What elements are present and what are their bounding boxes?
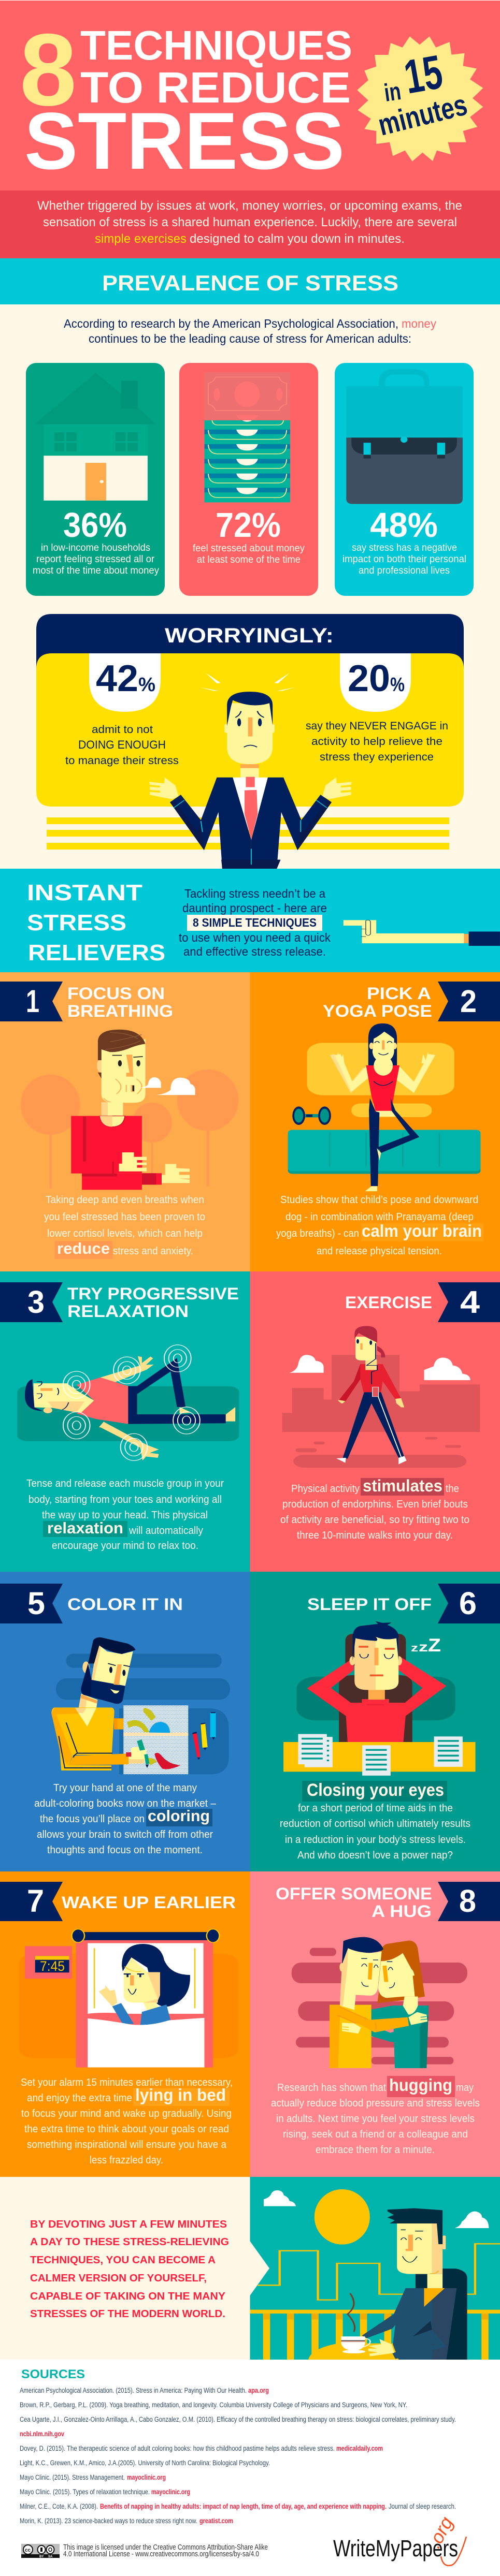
stat tag 20%: % bbox=[390, 674, 405, 696]
text: coloring: Try your hand at one of the many bbox=[53, 1782, 197, 1794]
text: sleep: And who doesn’t love a power nap? bbox=[297, 1849, 453, 1861]
stat tag 42%: % bbox=[138, 674, 155, 696]
stat 36%: 36% bbox=[63, 506, 127, 545]
ribbon number 8: 8 bbox=[459, 1883, 476, 1919]
text: relaxation bbox=[26, 1477, 224, 1552]
panel: technique 7 wake up earlier bbox=[0, 1871, 250, 2177]
intro band: Whether triggered by issues at work, money worries, or upcoming exams, the bbox=[37, 199, 462, 213]
ribbon number 8 bbox=[438, 1882, 500, 1921]
panel: 48 percent card bbox=[335, 363, 474, 596]
logo: WriteMyPapers.org: WriteMyPapers bbox=[333, 2535, 458, 2562]
panel: instant stress relievers bbox=[0, 869, 500, 972]
text: yoga bbox=[276, 1194, 483, 1257]
text: yoga: yoga breaths) - can bbox=[276, 1227, 359, 1239]
sources bbox=[20, 2367, 456, 2525]
panel: 36 percent card bbox=[26, 363, 165, 596]
panel: technique 5 color it in bbox=[0, 1572, 250, 1871]
illustration: man lying on mat bbox=[17, 1345, 239, 1460]
zzZ text: Z bbox=[428, 1635, 441, 1656]
heading: pick a yoga pose: PICK A bbox=[367, 984, 431, 1003]
intro text: daunting prospect - here are bbox=[182, 901, 327, 915]
badge: in 15 minutes: in bbox=[382, 78, 403, 107]
heading: worryingly: WORRYINGLY: bbox=[165, 624, 334, 647]
icon: briefcase bbox=[346, 369, 463, 504]
text 20%: activity to help relieve the bbox=[311, 736, 442, 748]
panel: closing statement: BY DEVOTING JUST A FEW MINUTES bbox=[30, 2219, 227, 2230]
panel: 72 percent card bbox=[179, 363, 318, 596]
text: hug: may bbox=[456, 2082, 474, 2094]
icon: creative commons badge bbox=[21, 2544, 60, 2558]
header panel bbox=[0, 1, 500, 191]
logo: WriteMyPapers.org bbox=[333, 2513, 466, 2566]
ribbon number 6 bbox=[438, 1584, 500, 1623]
panel: closing statement: STRESSES OF THE MODERN WORLD. bbox=[30, 2308, 225, 2320]
text 42% bbox=[65, 724, 179, 767]
ribbon number 3: 3 bbox=[27, 1284, 45, 1320]
heading: try progressive relaxation bbox=[67, 1284, 239, 1321]
stat 72%: 72% bbox=[216, 506, 281, 545]
heading: focus on breathing: FOCUS ON bbox=[67, 984, 165, 1003]
icon: pointing hand bbox=[344, 920, 500, 946]
panel: closing statement bbox=[0, 2177, 269, 2360]
text: coloring: allows your brain to switch off from other bbox=[37, 1828, 213, 1840]
badge: in 15 minutes bbox=[357, 36, 483, 162]
ribbon number 2 bbox=[438, 982, 500, 1021]
illustration: man napping at desk bbox=[283, 1621, 476, 1776]
ribbon number 5 bbox=[0, 1584, 63, 1623]
ribbon number 4: 4 bbox=[460, 1284, 480, 1320]
panel: technique 1 focus on breathing bbox=[0, 972, 250, 1272]
intro band: sensation of stress is a shared human experience. Luckily, there are several bbox=[43, 215, 457, 229]
ribbon number 6: 6 bbox=[459, 1586, 477, 1621]
source list: Benefits of napping in healthy adults: impact of nap length, time of day, age, and experience with napping. bbox=[100, 2502, 387, 2510]
yellow stripes bbox=[47, 817, 449, 850]
ribbon number 3 bbox=[0, 1282, 63, 1322]
ribbon number 7: 7 bbox=[27, 1883, 44, 1919]
source list: ncbi.nlm.nih.gov bbox=[20, 2430, 64, 2438]
title: TO REDUCE: TO REDUCE bbox=[80, 63, 351, 112]
text: coloring: the focus you’ll place on bbox=[40, 1813, 145, 1825]
text: exercise: the bbox=[446, 1483, 459, 1495]
panel: 36 percent card: report feeling stressed all or bbox=[36, 553, 154, 565]
source list: mayoclinic.org bbox=[151, 2488, 190, 2496]
intro band: simple exercises bbox=[95, 232, 187, 246]
heading: offer someone a hug: A HUG bbox=[372, 1902, 432, 1921]
text: breathing: reduce bbox=[57, 1239, 110, 1257]
heading: pick a yoga pose: YOGA POSE bbox=[323, 1002, 432, 1020]
intro text bbox=[179, 887, 331, 958]
text: hug: embrace them for a minute. bbox=[316, 2144, 435, 2156]
text: relaxation: body, starting from your toes and working all bbox=[28, 1494, 222, 1505]
source list: Light, K.C., Grewen, K.M., Amico, J.A.(2005). University of North Carolina: Biological Psychology. bbox=[20, 2459, 270, 2467]
panel: closing statement: TECHNIQUES, YOU CAN BECOME A bbox=[30, 2255, 216, 2266]
prevalence intro text: According to research by the American Psychological Association, bbox=[64, 317, 398, 330]
license text bbox=[63, 2543, 268, 2558]
heading: focus on breathing: BREATHING bbox=[67, 1002, 173, 1020]
heading: prevalence of stress bbox=[0, 258, 500, 304]
source list: Brown, R.P., Gerbarg, P.L. (2009). Yoga breathing, meditation, and longevity. Columbia University College of Physicians and Surgeons, New York, NY. bbox=[20, 2401, 407, 2409]
clock time: 7:45 bbox=[40, 1958, 65, 1974]
text: sleep: Closing your eyes bbox=[307, 1780, 444, 1800]
prevalence intro text: continues to be the leading cause of stress for American adults: bbox=[89, 332, 411, 345]
text: exercise bbox=[280, 1476, 469, 1541]
text: hug: rising, seek out a friend or a colleague and bbox=[283, 2128, 468, 2140]
text 20%: say they NEVER ENGAGE in bbox=[306, 720, 448, 732]
license text: 4.0 International License - www.creativecommons.org/licenses/by-sa/4.0 bbox=[63, 2550, 259, 2558]
illustration: bearded man coloring bbox=[51, 1637, 230, 1774]
text: breathing: stress and anxiety. bbox=[113, 1245, 193, 1257]
text: hug: actually reduce blood pressure and stress levels bbox=[271, 2097, 480, 2109]
heading: instant stress relievers: STRESS bbox=[27, 910, 126, 935]
text: hug: Research has shown that bbox=[277, 2082, 386, 2094]
license text: This image is licensed under the Creative Commons Attribution-Share Alike bbox=[63, 2543, 268, 2552]
text: exercise: stimulates bbox=[363, 1476, 442, 1495]
ribbon number 4 bbox=[438, 1282, 500, 1322]
icon: creative commons badge: SA bbox=[48, 2555, 53, 2558]
text: yoga: calm your brain bbox=[362, 1221, 482, 1240]
text: wake up: and enjoy the extra time bbox=[27, 2092, 132, 2104]
text: relaxation: will automatically bbox=[128, 1525, 204, 1536]
heading: sources: SOURCES bbox=[21, 2367, 85, 2381]
ribbon number 1 bbox=[0, 982, 63, 1021]
text: breathing: Taking deep and even breaths when bbox=[46, 1194, 204, 1206]
text: breathing: you feel stressed has been proven to bbox=[44, 1211, 205, 1223]
intro text: to use when you need a quick bbox=[179, 931, 331, 944]
panel: worryingly bbox=[36, 614, 464, 869]
panel: 72 percent card: at least some of the time bbox=[197, 554, 301, 565]
prevalence intro text: money bbox=[402, 317, 436, 330]
source list bbox=[20, 2387, 456, 2525]
panel: technique 3 progressive relaxation bbox=[0, 1271, 250, 1572]
text: relaxation: the way up to your head. This physical bbox=[42, 1509, 208, 1521]
panel: 72 percent card: feel stressed about money bbox=[193, 543, 305, 554]
text: breathing: lower cortisol levels, which can help bbox=[47, 1227, 203, 1239]
text: breathing bbox=[44, 1194, 205, 1259]
heading: instant stress relievers: INSTANT bbox=[27, 880, 142, 905]
logo: WriteMyPapers.org: .org bbox=[423, 2513, 457, 2552]
badge: in 15 minutes: minutes bbox=[375, 87, 470, 142]
illustration: woman in yoga pose bbox=[288, 1023, 480, 1191]
panel: technique 4 exercise bbox=[250, 1271, 500, 1572]
icon: stack of money bbox=[204, 372, 290, 502]
heading: offer someone a hug: OFFER SOMEONE bbox=[276, 1884, 432, 1903]
ribbon number 7 bbox=[0, 1882, 63, 1921]
text 42%: DOING ENOUGH bbox=[78, 738, 166, 751]
intro text: Tackling stress needn’t be a bbox=[184, 887, 325, 900]
panel: closing statement: CALMER VERSION OF YOURSELF, bbox=[30, 2273, 207, 2284]
heading: exercise: EXERCISE bbox=[345, 1293, 432, 1312]
text: sleep: reduction of cortisol which ultimately results bbox=[280, 1818, 470, 1829]
heading: wake up earlier: WAKE UP EARLIER bbox=[62, 1893, 236, 1912]
text: wake up: lying in bed bbox=[135, 2085, 226, 2104]
text: yoga: and release physical tension. bbox=[317, 1245, 442, 1257]
illustration: woman walking bbox=[282, 1326, 480, 1468]
prevalence intro text bbox=[64, 317, 436, 345]
intro text: 8 SIMPLE TECHNIQUES bbox=[193, 916, 317, 929]
heading: color it in: COLOR IT IN bbox=[67, 1595, 183, 1614]
ribbon number 1: 1 bbox=[26, 984, 39, 1019]
intro band bbox=[0, 191, 500, 258]
text: yoga: dog - in combination with Pranayama (deep bbox=[285, 1211, 474, 1223]
text: sleep bbox=[280, 1780, 470, 1861]
title: big number 8: 8 bbox=[20, 12, 77, 127]
text 20%: stress they experience bbox=[320, 751, 434, 763]
panel: closing statement: A DAY TO THESE STRESS-RELIEVING bbox=[30, 2236, 229, 2248]
text: wake up: the extra time to think about your goals or read bbox=[24, 2123, 229, 2135]
source list: Mayo Clinic. (2015). Types of relaxation technique. bbox=[20, 2488, 150, 2496]
source list: Milner, C.E., Cote, K.A. (2008). bbox=[20, 2502, 98, 2510]
text: coloring: thoughts and focus on the moment. bbox=[47, 1844, 203, 1856]
text: wake up: Set your alarm 15 minutes earlier than necessary, bbox=[21, 2076, 233, 2088]
text 42%: to manage their stress bbox=[65, 755, 179, 767]
heading: instant stress relievers: RELIEVERS bbox=[28, 940, 165, 965]
heading: focus on breathing bbox=[67, 984, 173, 1020]
text: exercise: production of endorphins. Even brief bouts bbox=[282, 1498, 468, 1510]
text: sleep: for a short period of time aids in the bbox=[298, 1802, 453, 1814]
source list: Journal of sleep research. bbox=[389, 2502, 456, 2510]
stat 48%: 48% bbox=[370, 506, 438, 545]
text: wake up: less frazzled day. bbox=[90, 2154, 163, 2166]
heading: instant stress relievers bbox=[27, 880, 165, 965]
panel: closing illustration bbox=[250, 2177, 500, 2360]
zzZ text bbox=[411, 1635, 441, 1656]
text: coloring: coloring bbox=[148, 1807, 210, 1825]
stat tag 42% bbox=[89, 653, 161, 712]
intro band: designed to calm you down in minutes. bbox=[190, 232, 405, 246]
text: wake up bbox=[21, 2076, 233, 2166]
heading: prevalence of stress: PREVALENCE OF STRESS bbox=[102, 271, 398, 295]
text: hug: hugging bbox=[389, 2075, 452, 2095]
panel: 36 percent card: most of the time about money bbox=[33, 565, 159, 576]
panel: technique 2 pick a yoga pose bbox=[250, 972, 500, 1272]
panel: 36 percent card: in low-income households bbox=[41, 542, 150, 553]
text: exercise: of activity are beneficial, so try fitting two to bbox=[280, 1514, 469, 1526]
text 42%: admit to not bbox=[92, 724, 153, 736]
text: relaxation: Tense and release each muscle group in your bbox=[26, 1477, 224, 1489]
text: coloring: adult-coloring books now on the market – bbox=[34, 1797, 217, 1809]
text: exercise: three 10-minute walks into your day. bbox=[297, 1529, 453, 1541]
panel: closing statement: CAPABLE OF TAKING ON THE MANY bbox=[30, 2291, 226, 2302]
source list: Dovey, D. (2015). The therapeutic science of adult coloring books: how this childhood pastime helps adults relieve stress. bbox=[20, 2445, 335, 2452]
illustration: couple hugging bbox=[292, 1937, 467, 2068]
panel: technique 6 sleep it off bbox=[250, 1572, 500, 1871]
text: sleep: in a reduction in your body’s stress levels. bbox=[285, 1834, 466, 1846]
panel: 48 percent card: impact on both their personal bbox=[342, 553, 466, 565]
source list: Morin, K. (2013). 23 science-backed ways to reduce stress right now. bbox=[20, 2517, 197, 2525]
stat tag 20%: 20 bbox=[348, 658, 390, 699]
text 20% bbox=[306, 720, 448, 763]
illustration: woman waking in bed bbox=[19, 1929, 238, 2068]
text: coloring bbox=[34, 1782, 217, 1856]
ribbon number 2: 2 bbox=[460, 984, 477, 1019]
zzZ text: z bbox=[411, 1643, 418, 1654]
cream prevalence background bbox=[0, 304, 500, 869]
zzZ text: z bbox=[419, 1639, 428, 1655]
stat tag 20% bbox=[340, 653, 411, 712]
heading: offer someone a hug bbox=[276, 1884, 432, 1921]
title: TECHNIQUES: TECHNIQUES bbox=[80, 22, 352, 68]
panel: technique 8 hug bbox=[250, 1871, 500, 2177]
text: relaxation: relaxation bbox=[47, 1519, 123, 1537]
illustration: worried man bbox=[149, 673, 352, 869]
heading: pick a yoga pose bbox=[323, 984, 432, 1020]
source list: Mayo Clinic. (2015). Stress Management. bbox=[20, 2473, 125, 2481]
source list: American Psychological Association. (2015). Stress in America: Paying With Our Health. bbox=[20, 2387, 247, 2394]
icon: house bbox=[34, 373, 156, 501]
badge: in 15 minutes: 15 bbox=[401, 46, 446, 104]
text: hug: in adults. Next time you feel your stress levels bbox=[276, 2113, 475, 2125]
text: exercise: Physical activity bbox=[291, 1483, 360, 1495]
heading: try progressive relaxation: TRY PROGRESSIVE bbox=[67, 1284, 239, 1303]
text: wake up: something inspirational will ensure you have a bbox=[27, 2139, 227, 2150]
ribbon number 5: 5 bbox=[27, 1586, 45, 1621]
source list: apa.org bbox=[248, 2387, 269, 2394]
stat tag 42%: 42 bbox=[96, 658, 138, 699]
source list: greatist.com bbox=[199, 2517, 233, 2525]
text: yoga: Studies show that child’s pose and downward bbox=[280, 1194, 478, 1206]
icon: creative commons badge: BY bbox=[39, 2555, 44, 2558]
source list: medicaldaily.com bbox=[336, 2445, 383, 2452]
title: STRESS: STRESS bbox=[24, 96, 345, 186]
icon: creative commons badge: cc bbox=[25, 2548, 31, 2553]
panel: 48 percent card: say stress has a negative bbox=[352, 542, 457, 553]
text: relaxation: encourage your mind to relax too. bbox=[52, 1540, 198, 1552]
source list: mayoclinic.org bbox=[127, 2473, 166, 2481]
text: wake up: to focus your mind and wake up gradually. Using bbox=[21, 2107, 232, 2119]
heading: try progressive relaxation: RELAXATION bbox=[67, 1302, 189, 1321]
panel: 48 percent card: and professional lives bbox=[359, 565, 450, 576]
intro text: and effective stress release. bbox=[183, 945, 326, 958]
heading: sleep it off: SLEEP IT OFF bbox=[307, 1595, 432, 1614]
text: hug bbox=[271, 2075, 480, 2156]
illustration: man breathing bbox=[21, 1030, 238, 1190]
